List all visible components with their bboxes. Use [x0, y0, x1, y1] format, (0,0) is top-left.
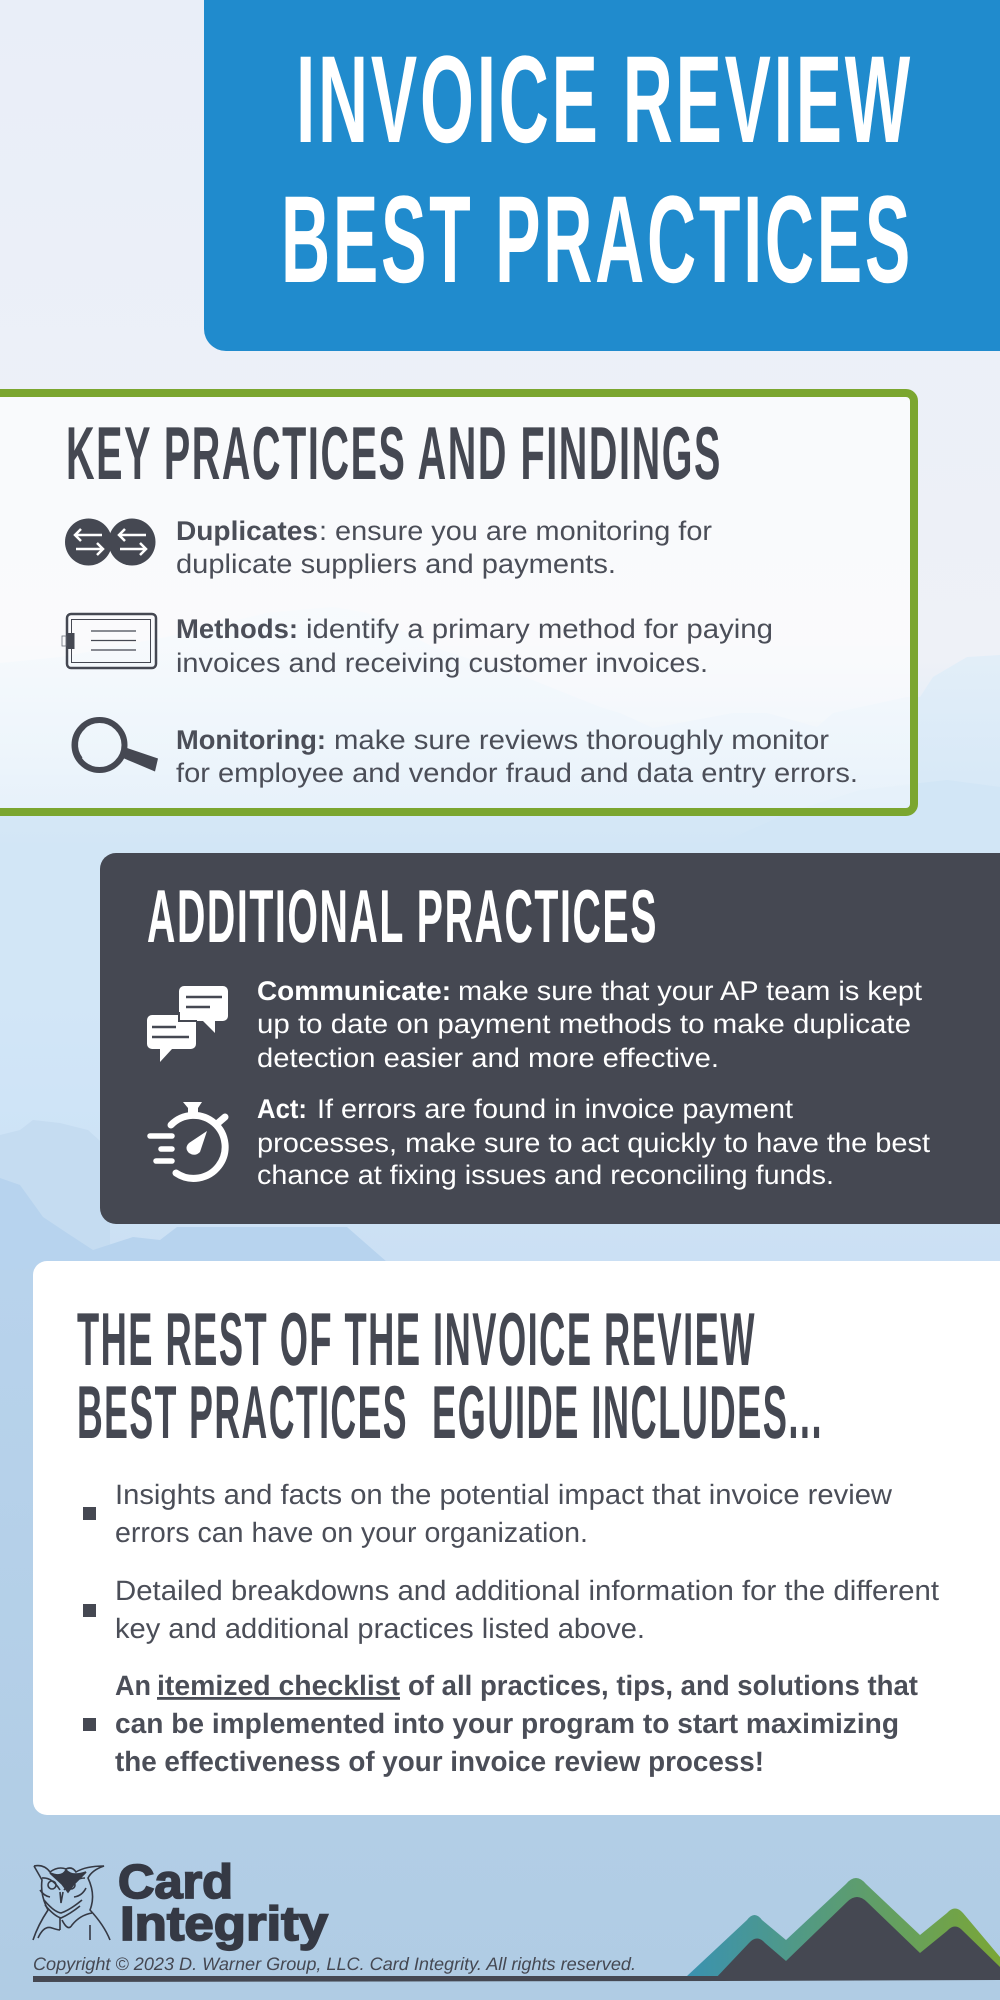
bullet: checklist: An: [115, 1670, 151, 1701]
icon: duplicates: [65, 518, 156, 566]
bullet: insights: errors can have on your organization.: [115, 1517, 588, 1548]
text: act: Act:: [257, 1094, 307, 1124]
text: monitoring: for employee and vendor fraud and data entry errors.: [176, 758, 858, 788]
text: duplicates: Duplicates: [176, 516, 318, 546]
icon: magnifier: [74, 720, 158, 772]
text: act: chance at fixing issues and reconciling funds.: [257, 1160, 834, 1190]
icon: chat bubbles: [147, 986, 228, 1062]
bullet: insights: [83, 1479, 893, 1548]
text: monitoring: Monitoring:: [176, 725, 326, 755]
bullet: insights: Insights and facts on the potential impact that invoice review: [115, 1479, 893, 1510]
text: duplicates: : ensure you are monitoring for: [319, 516, 712, 546]
logo: wordmark: Integrity: [120, 1898, 328, 1951]
bullet: checklist: of all practices, tips, and solutions that: [408, 1670, 918, 1701]
text: monitoring: make sure reviews thoroughly monitor: [334, 725, 829, 755]
copyright: Copyright © 2023 D. Warner Group, LLC. Card Integrity. All rights reserved.: [33, 1954, 636, 1974]
heading: rest of the eguide: BEST PRACTICES: [77, 1370, 408, 1454]
icon: card: [62, 614, 156, 668]
text: act: processes, make sure to act quickly to have the best: [257, 1128, 931, 1158]
logo: wordmark: Card: [118, 1856, 233, 1909]
bullet: breakdowns: Detailed breakdowns and additional information for the different: [115, 1575, 939, 1606]
text: communicate: Communicate:: [257, 976, 451, 1006]
footer mountains: [33, 1878, 1000, 1982]
panel: additional practices: [100, 853, 1000, 1224]
text: act: [257, 1094, 931, 1190]
text: monitoring: [176, 725, 858, 788]
text: act: If errors are found in invoice payment: [317, 1094, 794, 1124]
text: duplicates: [176, 516, 712, 579]
bullet: checklist: can be implemented into your program to start maximizing: [115, 1708, 899, 1739]
panel: rest of the eguide: [33, 1261, 1000, 1815]
text: methods: invoices and receiving customer invoices.: [176, 648, 708, 678]
text: communicate: detection easier and more effective.: [257, 1043, 719, 1073]
logo: owl: [33, 1866, 110, 1940]
text: duplicates: duplicate suppliers and payments.: [176, 549, 616, 579]
bullet: checklist: [83, 1670, 918, 1777]
bullet: breakdowns: key and additional practices listed above.: [115, 1613, 645, 1644]
text: methods: Methods:: [176, 614, 298, 644]
text: communicate: [257, 976, 923, 1073]
heading: rest of the eguide: [77, 1297, 823, 1454]
bullet: checklist: the effectiveness of your invoice review process!: [115, 1746, 764, 1777]
icon: stopwatch: [150, 1102, 225, 1178]
title: [281, 31, 913, 309]
header banner: [204, 0, 1000, 351]
text: communicate: make sure that your AP team is kept: [458, 976, 923, 1006]
bullet: breakdowns: [83, 1575, 939, 1644]
bullet: checklist: itemized checklist: [157, 1670, 400, 1701]
logo: wordmark: [118, 1856, 328, 1951]
panel: key practices and findings: [0, 393, 914, 812]
text: communicate: up to date on payment methods to make duplicate: [257, 1009, 911, 1039]
text: methods: [176, 614, 773, 678]
text: methods: identify a primary method for paying: [306, 614, 773, 644]
